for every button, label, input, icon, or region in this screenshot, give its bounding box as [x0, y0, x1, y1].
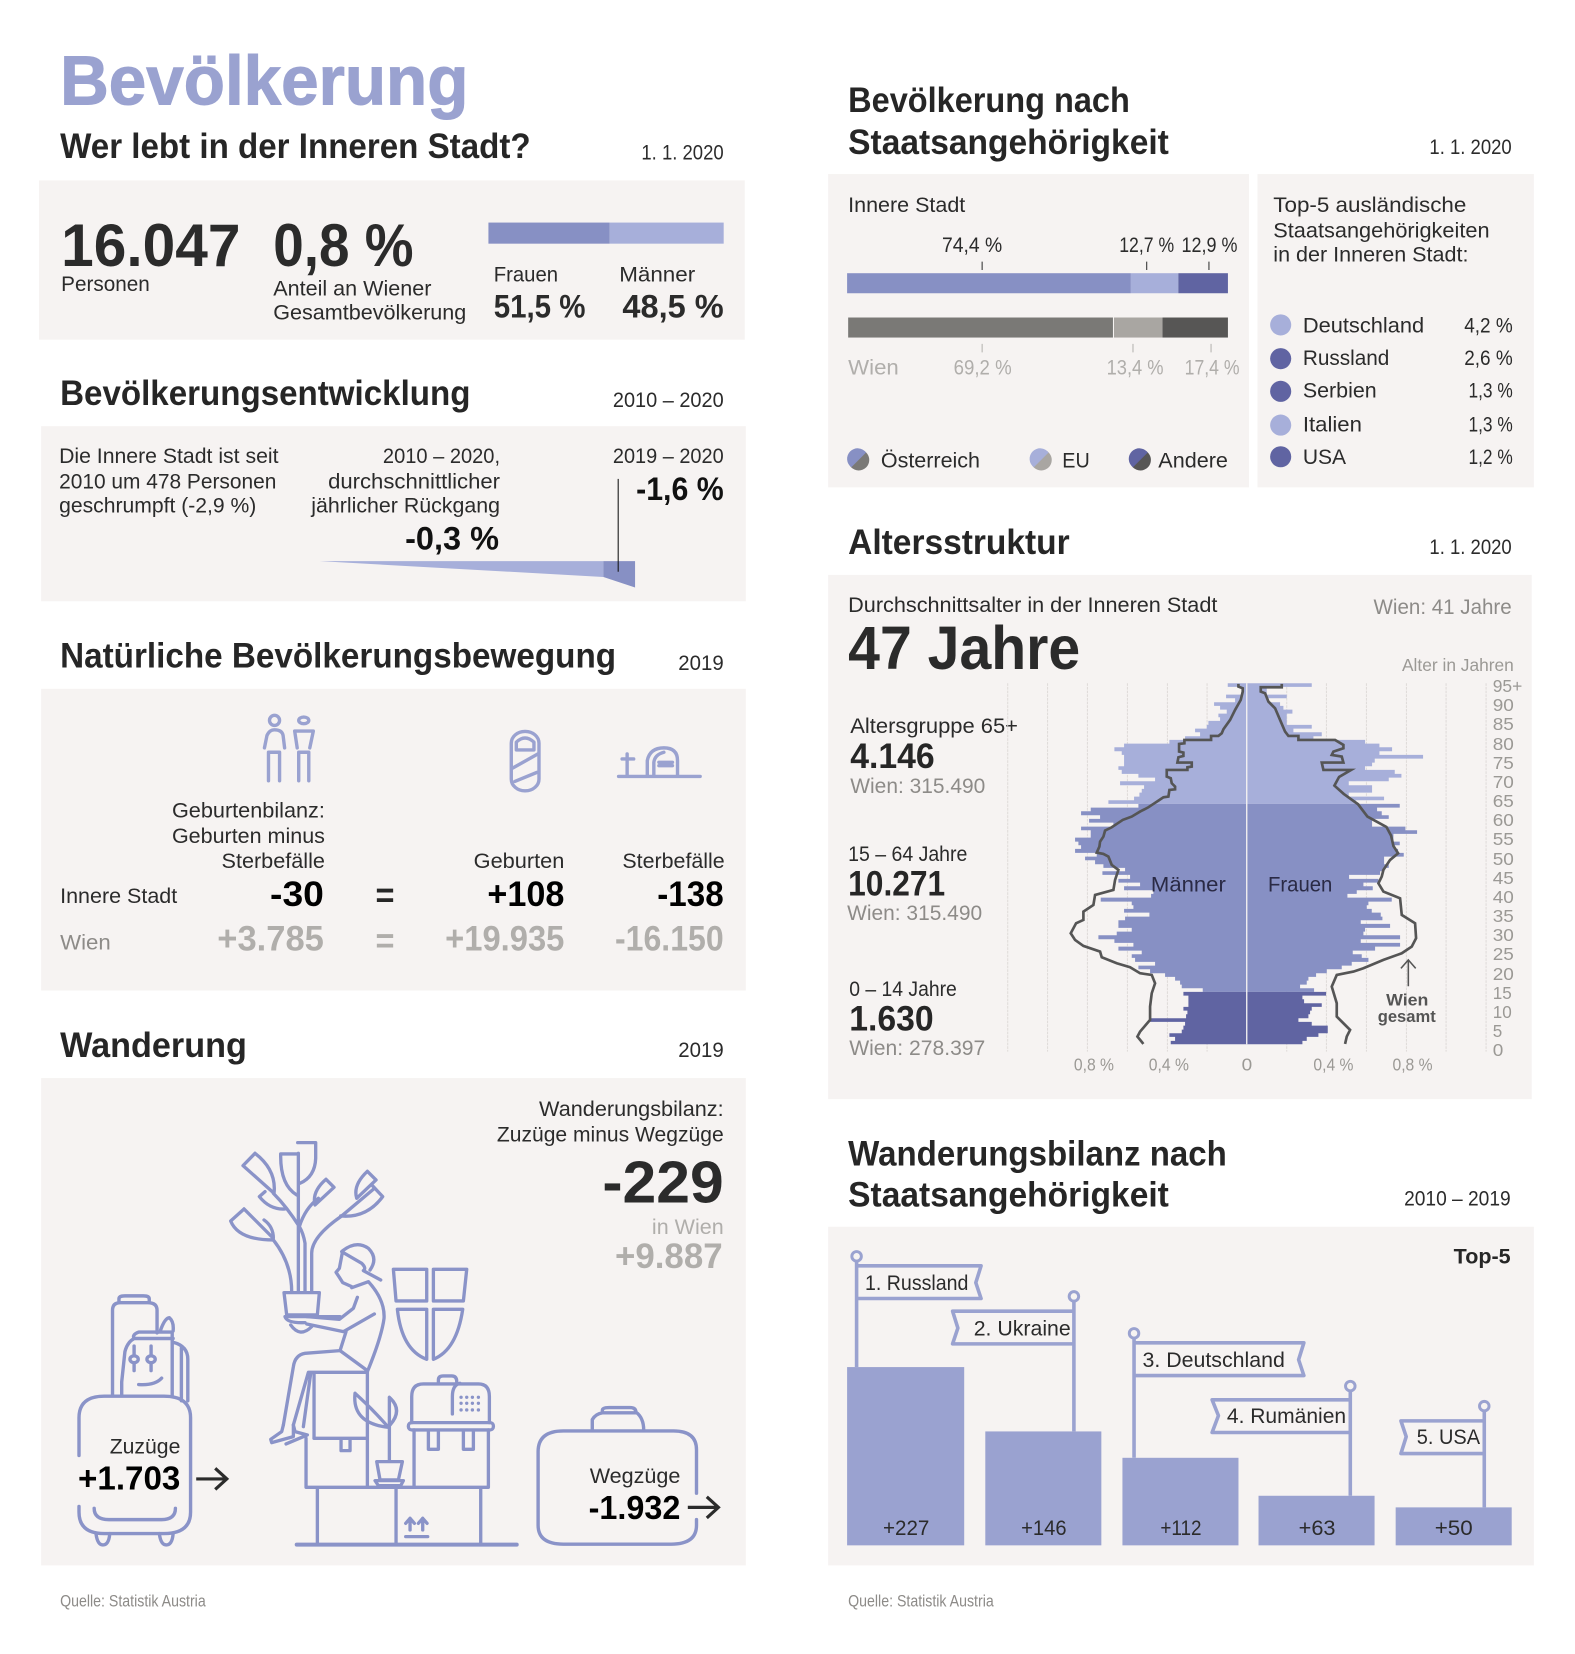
label: Frauen: Frauen — [1268, 873, 1332, 896]
top 5 list: 4,2 % — [1464, 314, 1513, 337]
heading: Wer lebt in der Inneren Stadt? — [60, 127, 531, 166]
gender figures — [494, 264, 724, 325]
age axis: 55 — [1493, 829, 1514, 849]
column headers — [172, 800, 725, 873]
arrow: out — [688, 1497, 718, 1518]
section: Altersstruktur — [828, 523, 1532, 1099]
figure: share of Vienna: 0,8 % — [273, 212, 414, 279]
bar: Deutschland — [1122, 1458, 1238, 1545]
row: Wien: Wien — [60, 931, 111, 954]
heading: Bevölkerung nach — [848, 81, 1130, 120]
bar: Ukraine: +146 — [1021, 1517, 1067, 1540]
annual decline label: -0,3 % — [405, 520, 499, 557]
last year label — [613, 445, 724, 507]
illustration: suitcase right — [538, 1408, 696, 1544]
heading — [848, 1135, 1227, 1215]
row: Innere Stadt: -138 — [657, 875, 724, 914]
label: Zuzüge: Zuzüge — [110, 1436, 180, 1459]
group 0-14: 0 – 14 Jahre — [849, 978, 957, 1001]
share axis: 0 — [1242, 1055, 1252, 1075]
share axis: 0,8 % — [1074, 1055, 1114, 1075]
age axis: 15 — [1493, 983, 1512, 1003]
source right: Quelle: Statistik Austria — [848, 1592, 994, 1611]
text block: 2010 um 478 Personen — [59, 470, 276, 493]
group 0-14: Wien: 278.397 — [849, 1037, 985, 1060]
top 5 heading: Staatsangehörigkeiten — [1273, 219, 1490, 242]
top 5 heading: Top-5 ausländische — [1273, 194, 1466, 217]
icon: swaddled baby — [511, 731, 539, 791]
bar: Wien — [848, 318, 1240, 379]
text block: geschrumpft (-2,9 %) — [59, 495, 256, 518]
panel: top 5 — [1257, 174, 1534, 487]
migration balance: Wanderungsbilanz: — [539, 1098, 724, 1121]
age axis: 40 — [1493, 887, 1514, 907]
figure: share of Vienna: Anteil an Wiener — [273, 277, 431, 300]
gender figures: 51,5 % — [494, 288, 585, 325]
top 5 list: 2,6 % — [1464, 347, 1513, 370]
label: Wegzüge: Wegzüge — [590, 1465, 680, 1488]
age axis: 70 — [1493, 772, 1514, 792]
bar: Ukraine — [985, 1431, 1101, 1545]
age axis: 35 — [1493, 906, 1514, 926]
panel — [41, 1078, 746, 1565]
bar: Deutschland: +112 — [1160, 1517, 1202, 1540]
figure: share of Vienna: Gesamtbevölkerung — [273, 302, 466, 325]
date: 1. 1. 2020 — [1429, 536, 1512, 559]
last year label: 2019 – 2020 — [613, 445, 724, 468]
average age — [848, 594, 1218, 682]
callout: Wien gesamt — [1378, 960, 1436, 1026]
age axis: 20 — [1493, 964, 1514, 984]
label: Zuzüge — [78, 1436, 180, 1497]
wedge chart — [320, 479, 635, 588]
column headers: Geburten — [474, 850, 564, 873]
illustration: Vienna coat of arms window — [393, 1269, 467, 1359]
icon: two people — [264, 715, 313, 781]
annual decline label: durchschnittlicher — [328, 470, 500, 493]
age axis: 45 — [1493, 868, 1514, 888]
illustration: plant and leaves — [231, 1143, 383, 1332]
migration balance — [497, 1098, 724, 1276]
share axis: 0,8 % — [1392, 1055, 1433, 1075]
share axis: 0,4 % — [1149, 1055, 1189, 1075]
age axis: 75 — [1493, 753, 1514, 773]
migration balance: -229 — [602, 1150, 724, 1216]
flag: Russland — [852, 1252, 981, 1367]
age axis: 10 — [1493, 1002, 1512, 1022]
illustration: backpack on box — [408, 1376, 493, 1487]
label: Zuzüge: +1.703 — [78, 1459, 180, 1497]
top 5 list — [1270, 314, 1513, 469]
label: Wegzüge: -1.932 — [589, 1489, 680, 1527]
flag: Ukraine — [953, 1292, 1079, 1431]
flag: Rumänien: 4. Rumänien — [1227, 1405, 1346, 1428]
age axis — [1402, 655, 1522, 1060]
Vienna average: Wien: 41 Jahre — [1374, 596, 1512, 619]
label: Männer: Männer — [1151, 873, 1226, 896]
row: Innere Stadt: Innere Stadt — [60, 885, 177, 908]
date: 2010 – 2019 — [1404, 1188, 1511, 1211]
group 15-64: 10.271 — [848, 865, 945, 904]
average age: 47 Jahre — [848, 614, 1080, 682]
label: Innere Stadt: Innere Stadt — [848, 194, 965, 217]
age axis: 0 — [1493, 1040, 1503, 1060]
figure: share of Vienna — [273, 212, 466, 325]
column headers: Geburtenbilanz: — [172, 800, 325, 823]
heading: Wanderungsbilanz nach — [848, 1135, 1227, 1174]
heading: Staatsangehörigkeit — [848, 1176, 1169, 1215]
age axis: 65 — [1493, 791, 1514, 811]
column headers: Sterbefälle — [622, 850, 725, 873]
bar: Innere Stadt: 74,4 % — [942, 234, 1002, 257]
date: 1. 1. 2020 — [641, 141, 724, 164]
panel: key figures — [39, 180, 745, 340]
bar: USA: +50 — [1435, 1517, 1473, 1540]
top 5 list: Deutschland — [1303, 314, 1424, 337]
average age: Durchschnittsalter in der Inneren Stadt — [848, 594, 1218, 617]
title: Bevölkerung — [60, 41, 468, 119]
date: 2019 — [678, 652, 724, 675]
age axis: 25 — [1493, 944, 1514, 964]
illustration: luggage left — [79, 1296, 191, 1545]
heading — [848, 81, 1169, 162]
row: Innere Stadt: +108 — [487, 875, 564, 914]
date: 1. 1. 2020 — [1429, 136, 1512, 159]
section: Natürliche Bevölkerungsbewegung — [41, 637, 746, 991]
top 5 list: Russland — [1303, 347, 1389, 370]
group 65+ — [850, 715, 1018, 798]
age axis: 90 — [1493, 695, 1514, 715]
row: Innere Stadt — [60, 875, 724, 915]
arrow: in — [196, 1468, 227, 1489]
heading: Natürliche Bevölkerungsbewegung — [60, 637, 616, 676]
source left: Quelle: Statistik Austria — [60, 1592, 206, 1611]
bar: Innere Stadt: 12,7 % — [1119, 234, 1174, 257]
section: Bevölkerung nach Staatsangehörigkeit — [828, 81, 1534, 487]
migration balance: Zuzüge minus Wegzüge — [497, 1123, 724, 1146]
flag: Deutschland — [1129, 1329, 1304, 1458]
flag: Rumänien — [1212, 1381, 1355, 1496]
flag: Deutschland: 3. Deutschland — [1142, 1349, 1285, 1372]
top 5 heading — [1273, 194, 1490, 267]
legend: Österreich — [881, 449, 980, 472]
group 15-64: Wien: 315.490 — [847, 902, 982, 925]
text block: Die Innere Stadt ist seit — [59, 445, 279, 468]
row: Innere Stadt: -30 — [270, 875, 324, 914]
bar: Wien: 17,4 % — [1185, 356, 1240, 379]
gender figures: Männer — [619, 264, 695, 287]
bar: Innere Stadt — [847, 234, 1237, 293]
row: Wien: +19.935 — [445, 919, 564, 958]
annual decline label: jährlicher Rückgang — [310, 495, 500, 518]
column headers: Sterbefälle — [222, 850, 325, 873]
section: Wanderungsbilanz nach Staatsangehörigkeit — [828, 1135, 1534, 1565]
flag: Ukraine: 2. Ukraine — [974, 1317, 1071, 1340]
row: Wien: = — [376, 922, 395, 961]
age axis: 85 — [1493, 714, 1514, 734]
share axis — [1074, 1055, 1433, 1075]
text block — [59, 445, 279, 518]
date: 2010 – 2020 — [613, 389, 724, 412]
section: Bevölkerungsentwicklung — [41, 374, 746, 601]
label: Wegzüge — [589, 1465, 680, 1527]
panel: stacked bars — [828, 174, 1249, 487]
top 5 list: USA — [1303, 446, 1347, 469]
heading: Staatsangehörigkeit — [848, 123, 1169, 162]
heading: Wanderung — [60, 1026, 247, 1065]
bar: USA — [1396, 1507, 1512, 1545]
bar: Rumänien: +63 — [1299, 1517, 1336, 1540]
group 0-14: 1.630 — [849, 1000, 934, 1039]
age axis: 80 — [1493, 734, 1514, 754]
migration balance: in Wien — [652, 1216, 724, 1239]
label: Top-5: Top-5 — [1454, 1246, 1511, 1269]
heading: Altersstruktur — [848, 523, 1070, 562]
row: Wien: +3.785 — [217, 919, 324, 958]
age axis: 60 — [1493, 810, 1514, 830]
legend — [847, 448, 1228, 472]
heading: Bevölkerungsentwicklung — [60, 374, 470, 413]
legend: Andere — [1158, 449, 1228, 472]
flag: USA: 5. USA — [1417, 1426, 1481, 1449]
panel — [828, 1227, 1534, 1565]
icon: grave — [619, 748, 700, 776]
panel — [41, 426, 746, 601]
bar: Innere Stadt: 12,9 % — [1182, 234, 1237, 257]
age axis: 5 — [1493, 1021, 1502, 1041]
panel — [828, 575, 1532, 1099]
top 5 heading: in der Inneren Stadt: — [1273, 244, 1468, 267]
last year label: -1,6 % — [636, 470, 724, 507]
column headers: Geburten minus — [172, 825, 325, 848]
population pyramid — [1008, 683, 1486, 1052]
age axis: Alter in Jahren — [1402, 655, 1514, 675]
illustration: person on boxes — [271, 1245, 517, 1545]
annual decline label: 2010 – 2020, — [383, 445, 500, 468]
group 0-14 — [849, 978, 985, 1060]
section: Wanderung — [41, 1026, 746, 1565]
bar: Wien: 69,2 % — [954, 356, 1012, 379]
bar: Wien: 13,4 % — [1107, 356, 1164, 379]
top 5 list: 1,3 % — [1468, 380, 1513, 403]
migration balance: +9.887 — [615, 1237, 723, 1276]
row: Wien — [60, 919, 724, 961]
panel — [41, 689, 746, 991]
annual decline label — [310, 445, 500, 557]
row: Innere Stadt: = — [376, 876, 395, 915]
bar: Russland — [847, 1367, 964, 1545]
flag: USA — [1401, 1401, 1489, 1507]
age axis: 30 — [1493, 925, 1514, 945]
top 5 list: Italien — [1303, 413, 1362, 436]
row: Wien: -16.150 — [615, 919, 724, 958]
group 15-64 — [847, 843, 982, 925]
group 15-64: 15 – 64 Jahre — [848, 843, 967, 866]
bar: Rumänien — [1259, 1496, 1375, 1545]
group 65+: 4.146 — [850, 737, 935, 776]
section: Wer lebt in der Inneren Stadt — [39, 127, 745, 340]
callout: Wien gesamt: gesamt — [1378, 1007, 1436, 1026]
gender figures: Frauen — [494, 264, 558, 287]
figure: persons: 16.047 — [61, 212, 241, 279]
date: 2019 — [678, 1039, 724, 1062]
bar: Wien: Wien — [848, 356, 899, 379]
share axis: 0,4 % — [1313, 1055, 1354, 1075]
bar: Russland: +227 — [883, 1517, 929, 1540]
gender figures: 48,5 % — [622, 288, 724, 325]
group 65+: Altersgruppe 65+ — [850, 715, 1018, 738]
top 5 list: 1,2 % — [1468, 446, 1513, 469]
callout: Wien gesamt: Wien — [1386, 990, 1428, 1009]
group 65+: Wien: 315.490 — [850, 775, 985, 798]
age axis: 95+ — [1493, 676, 1522, 696]
top 5 list: Serbien — [1303, 380, 1377, 403]
age axis: 50 — [1493, 849, 1514, 869]
figure: persons: Personen — [61, 273, 150, 296]
flag: Russland: 1. Russland — [865, 1272, 968, 1295]
gender bar — [488, 223, 724, 244]
legend: EU — [1062, 449, 1090, 472]
top 5 list: 1,3 % — [1468, 413, 1513, 436]
